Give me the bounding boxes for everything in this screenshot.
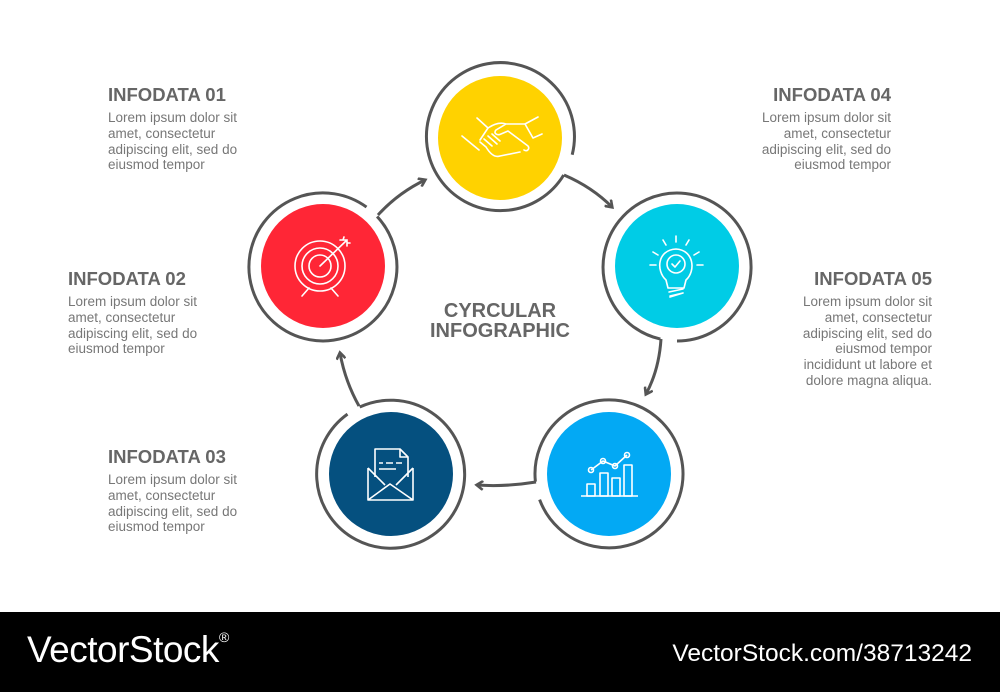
arrow: light blue to dark blue <box>477 482 536 486</box>
center title: INFOGRAPHIC <box>430 320 570 342</box>
text block: infodata 01: amet, consectetur <box>108 126 215 141</box>
text block: infodata 05: dolore magna aliqua. <box>806 373 932 388</box>
text block: infodata 04: amet, consectetur <box>784 126 891 141</box>
text block: infodata 01: adipiscing elit, sed do <box>108 142 237 157</box>
text block: infodata 02: Lorem ipsum dolor sit <box>68 294 197 309</box>
text block: infodata 03: Lorem ipsum dolor sit <box>108 472 237 487</box>
text block: infodata 04: INFODATA 04 <box>773 84 891 105</box>
text block: infodata 03: adipiscing elit, sed do <box>108 504 237 519</box>
text block: infodata 03: INFODATA 03 <box>108 446 226 467</box>
arrow: dark blue to red <box>340 353 359 406</box>
text block: infodata 01 <box>108 84 237 172</box>
text block: infodata 04: eiusmod tempor <box>794 157 891 172</box>
text block: infodata 04 <box>762 84 891 172</box>
text block: infodata 01: eiusmod tempor <box>108 157 205 172</box>
icon: lightbulb <box>650 236 703 297</box>
icon: target <box>295 237 350 296</box>
icon: bar chart <box>581 452 638 496</box>
text block: infodata 05 <box>803 268 932 388</box>
text block: infodata 01: Lorem ipsum dolor sit <box>108 110 237 125</box>
center title <box>430 300 570 342</box>
icon: envelope with document <box>368 449 413 500</box>
circle: cyan lightbulb <box>603 193 751 341</box>
text block: infodata 05: INFODATA 05 <box>814 268 932 289</box>
text block: infodata 05: eiusmod tempor <box>835 341 932 356</box>
text block: infodata 05: incididunt ut labore et <box>804 357 932 372</box>
icon: handshake <box>462 117 542 156</box>
arrow: yellow to cyan <box>564 175 612 207</box>
footer bar <box>0 612 1000 692</box>
footer url: VectorStock.com/38713242 <box>672 640 972 667</box>
text block: infodata 05: Lorem ipsum dolor sit <box>803 294 932 309</box>
text block: infodata 03: amet, consectetur <box>108 488 215 503</box>
text block: infodata 02: adipiscing elit, sed do <box>68 326 197 341</box>
text block: infodata 02: eiusmod tempor <box>68 341 165 356</box>
text block: infodata 04: adipiscing elit, sed do <box>762 142 891 157</box>
circle: light blue chart <box>535 400 683 548</box>
circle: red target <box>249 193 397 341</box>
text block: infodata 02 <box>68 268 197 356</box>
arrow: red to yellow <box>378 180 425 215</box>
text block: infodata 03: eiusmod tempor <box>108 519 205 534</box>
arrow: cyan to light blue <box>646 339 661 394</box>
text block: infodata 01: INFODATA 01 <box>108 84 226 105</box>
footer logo: VectorStock® <box>27 629 229 670</box>
text block: infodata 03 <box>108 446 237 534</box>
circle: yellow handshake <box>426 63 574 211</box>
text block: infodata 02: amet, consectetur <box>68 310 175 325</box>
text block: infodata 05: amet, consectetur <box>825 310 932 325</box>
text block: infodata 02: INFODATA 02 <box>68 268 186 289</box>
center title: CYRCULAR <box>444 300 557 322</box>
text block: infodata 05: adipiscing elit, sed do <box>803 326 932 341</box>
text block: infodata 04: Lorem ipsum dolor sit <box>762 110 891 125</box>
circle: dark blue mail <box>317 400 465 548</box>
